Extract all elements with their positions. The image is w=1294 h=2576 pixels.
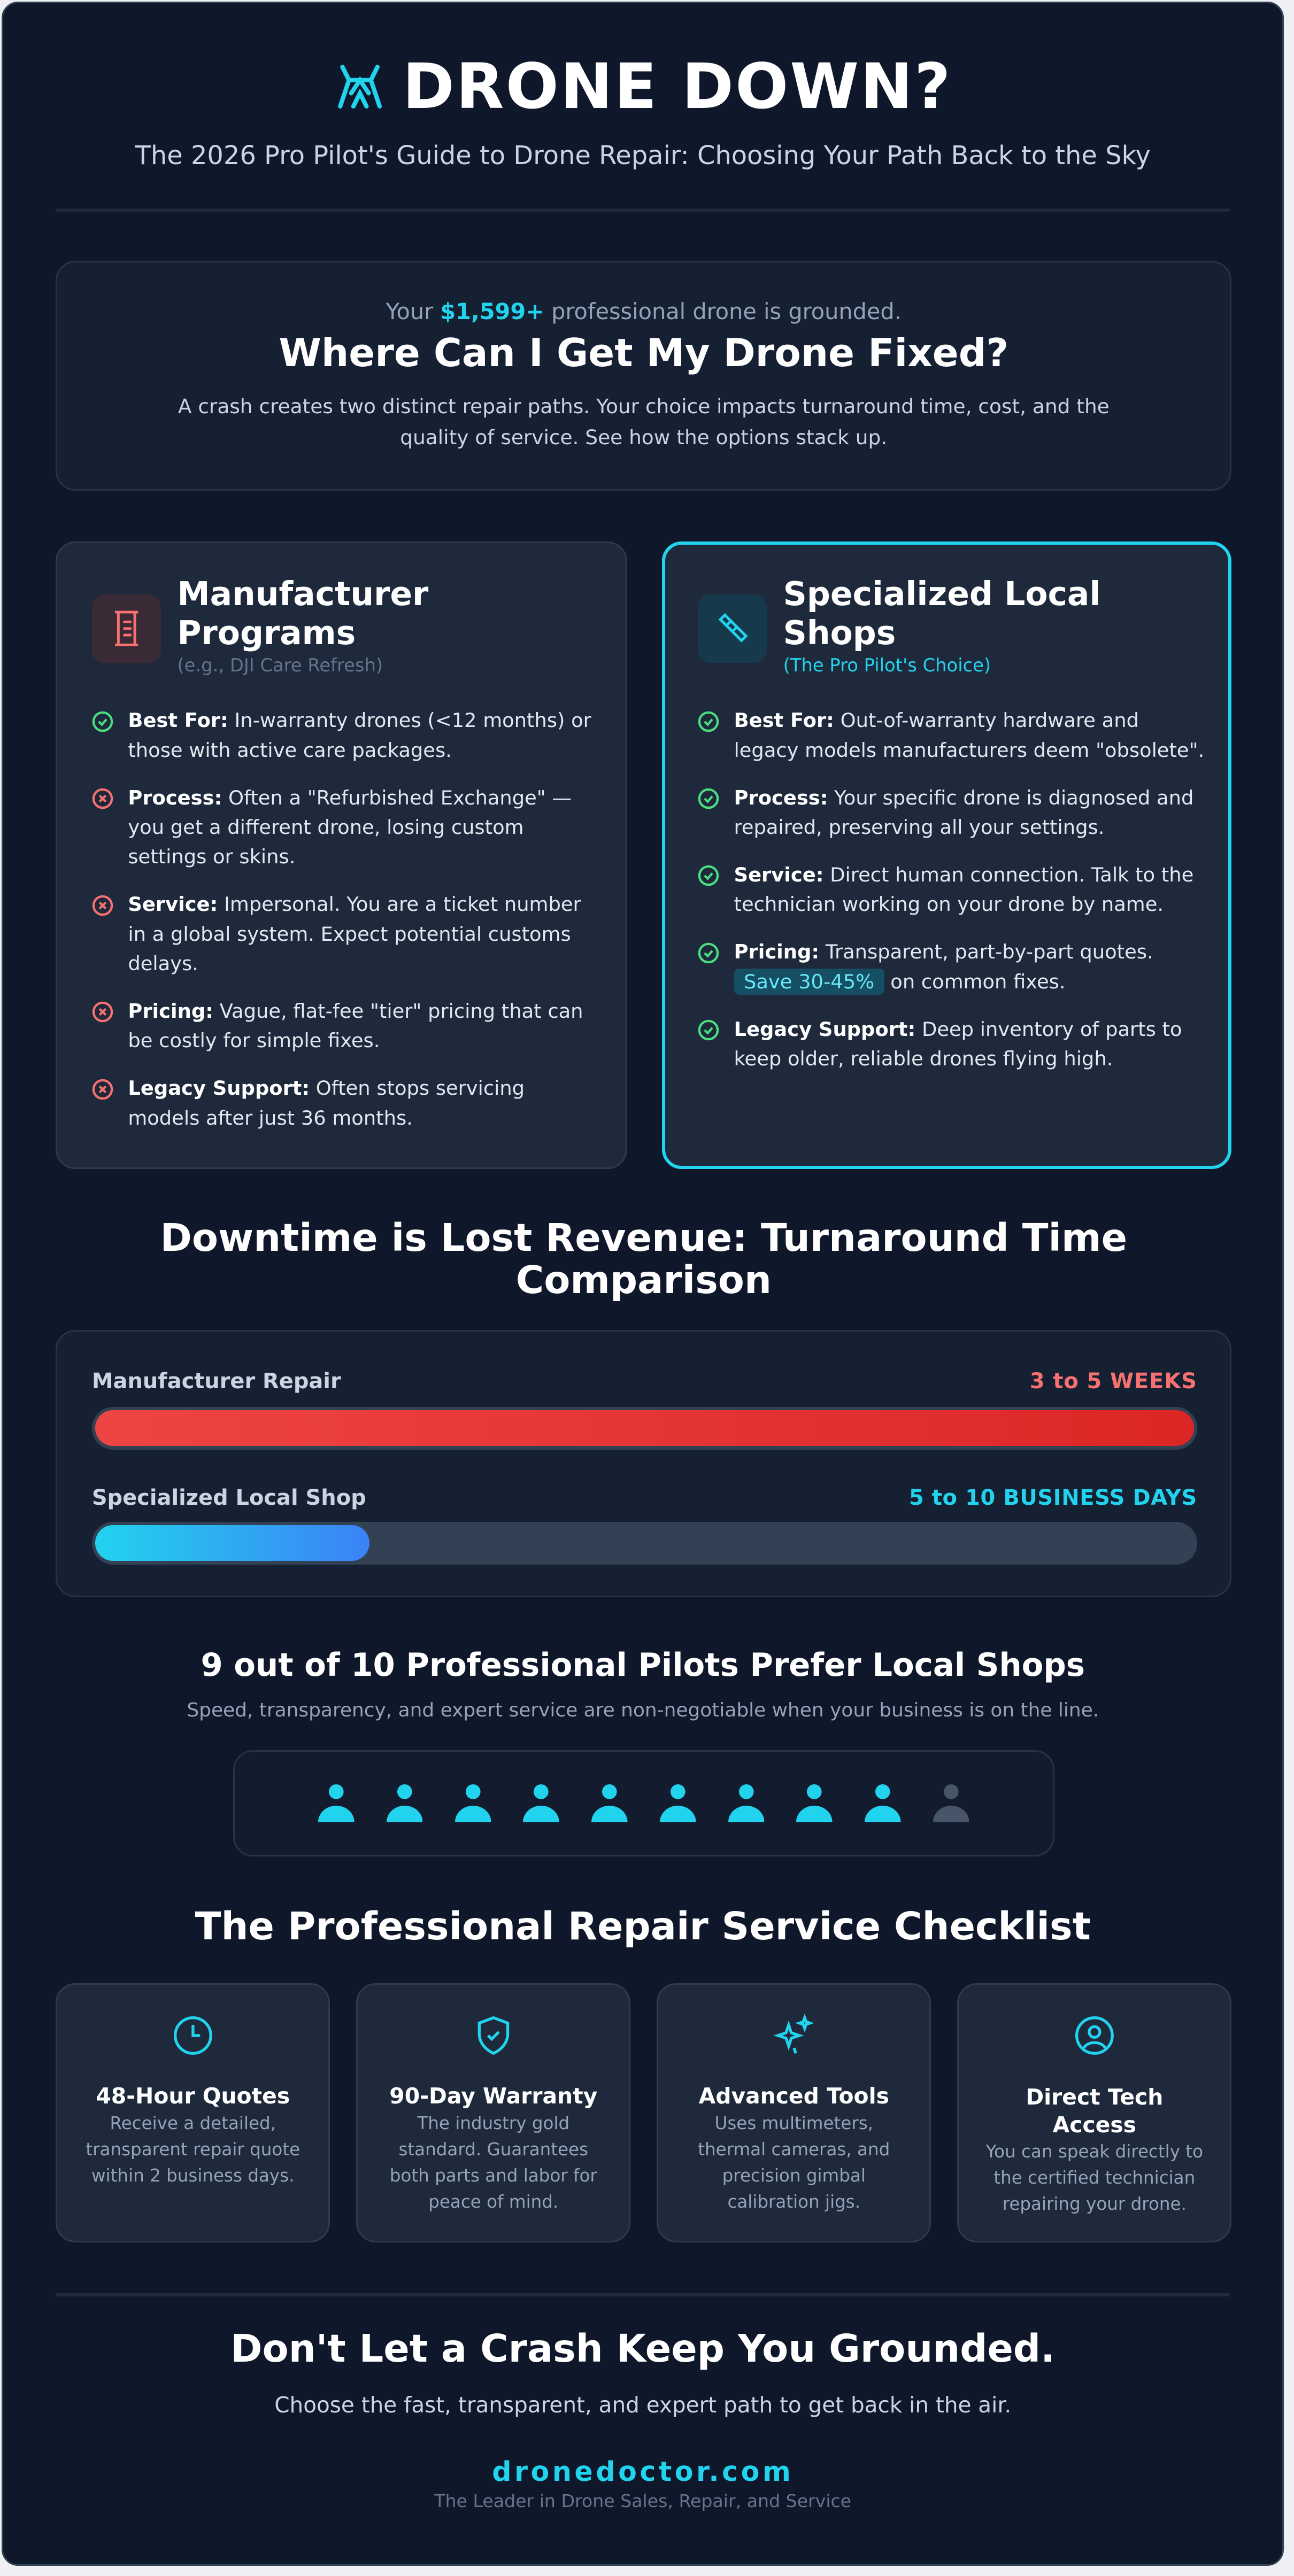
card: advanced tools: Advanced Tools xyxy=(699,2083,889,2109)
card: 90-day warranty: The industry gold standard. Guarantees both parts and labor for peace of mind. xyxy=(390,2113,597,2212)
heading: (The Pro Pilot's Choice) xyxy=(783,655,991,676)
card: direct tech access: You can speak directly to the certified technician repairing your drone. xyxy=(986,2141,1203,2214)
subtitle: The 2026 Pro Pilot's Guide to Drone Repair: Choosing Your Path Back to the Sky xyxy=(135,141,1151,171)
footer brand: dronedoctor.com xyxy=(492,2456,794,2487)
heading: Manufacturer Programs xyxy=(178,575,428,652)
bar chart: turnaround: Manufacturer Repair xyxy=(92,1369,341,1394)
card: 48-hour quotes: Receive a detailed, transparent repair quote within 2 business days. xyxy=(86,2113,300,2186)
icon: wrench xyxy=(698,594,767,663)
intro panel: Where Can I Get My Drone Fixed? xyxy=(279,331,1008,376)
intro panel: Your $1,599+ professional drone is grounded. xyxy=(386,299,902,324)
closing subtext: Choose the fast, transparent, and expert path to get back in the air. xyxy=(274,2392,1011,2417)
bar chart: turnaround: 3 to 5 WEEKS xyxy=(1030,1369,1197,1394)
intro panel: A crash creates two distinct repair paths. Your choice impacts turnaround time, cost, and the quality of service. See how the options stack up. xyxy=(178,394,1110,449)
list: local shop items xyxy=(698,709,1204,1070)
list: manufacturer items xyxy=(92,709,591,1130)
panel: manufacturer programs xyxy=(56,541,627,1169)
list: manufacturer items: Service: Impersonal. You are a ticket number in a global system. Expect potential customs delays. xyxy=(128,893,581,975)
list: local shop items: Process: Your specific drone is diagnosed and repaired, preserving all your settings. xyxy=(734,786,1193,839)
card: 48-hour quotes: 48-Hour Quotes xyxy=(96,2083,290,2109)
list: manufacturer items: Best For: In-warranty drones (<12 months) or those with active care packages. xyxy=(128,709,591,762)
intro panel xyxy=(56,261,1231,491)
card: advanced tools xyxy=(657,1983,931,2242)
icon: document xyxy=(92,594,161,663)
list: local shop items: Legacy Support: Deep inventory of parts to keep older, reliable drones flying high. xyxy=(734,1018,1182,1070)
footer tagline: The Leader in Drone Sales, Repair, and Service xyxy=(434,2490,851,2511)
card: 90-day warranty xyxy=(356,1983,630,2242)
bar chart: turnaround: 5 to 10 BUSINESS DAYS xyxy=(909,1486,1197,1510)
list: manufacturer items: Pricing: Vague, flat-fee "tier" pricing that can be costly for simple fixes. xyxy=(128,1000,583,1052)
panel: specialized local shops xyxy=(662,541,1231,1169)
card: direct tech access xyxy=(957,1983,1231,2242)
heading: turnaround: Downtime is Lost Revenue: Turnaround Time Comparison xyxy=(160,1216,1127,1302)
heading: Specialized Local Shops xyxy=(783,575,1100,652)
subtext: Speed, transparency, and expert service are non-negotiable when your business is on the line. xyxy=(187,1699,1099,1721)
pictogram: pilots xyxy=(233,1750,1054,1856)
title: DRONE DOWN? xyxy=(403,50,952,123)
list: manufacturer items: Process: Often a "Refurbished Exchange" — you get a different drone, losing custom settings or skins. xyxy=(128,786,572,868)
heading: 9 out of 10: 9 out of 10 Professional Pilots Prefer Local Shops xyxy=(201,1646,1085,1683)
card: 48-hour quotes xyxy=(56,1983,330,2242)
card: direct tech access: Direct Tech Access xyxy=(1026,2084,1163,2138)
icon: drone xyxy=(338,65,382,109)
list: local shop items: Pricing: Transparent, part-by-part quotes. Save 30-45% on common fixes. xyxy=(734,940,1153,993)
bar chart: turnaround xyxy=(56,1330,1231,1597)
heading: (e.g., DJI Care Refresh) xyxy=(178,655,383,676)
closing heading: Don't Let a Crash Keep You Grounded. xyxy=(230,2326,1055,2371)
list: local shop items: Best For: Out-of-warranty hardware and legacy models manufacturers deem "obsolete". xyxy=(734,709,1204,762)
bar chart: turnaround: Specialized Local Shop xyxy=(92,1486,366,1510)
checklist cards xyxy=(56,1983,1231,2242)
card: advanced tools: Uses multimeters, thermal cameras, and precision gimbal calibration jigs. xyxy=(698,2113,890,2212)
heading: checklist: The Professional Repair Service Checklist xyxy=(195,1904,1091,1948)
list: local shop items: Service: Direct human connection. Talk to the technician working on your drone by name. xyxy=(734,863,1193,916)
list: manufacturer items: Legacy Support: Often stops servicing models after just 36 months. xyxy=(128,1077,525,1130)
card: 90-day warranty: 90-Day Warranty xyxy=(389,2083,597,2109)
